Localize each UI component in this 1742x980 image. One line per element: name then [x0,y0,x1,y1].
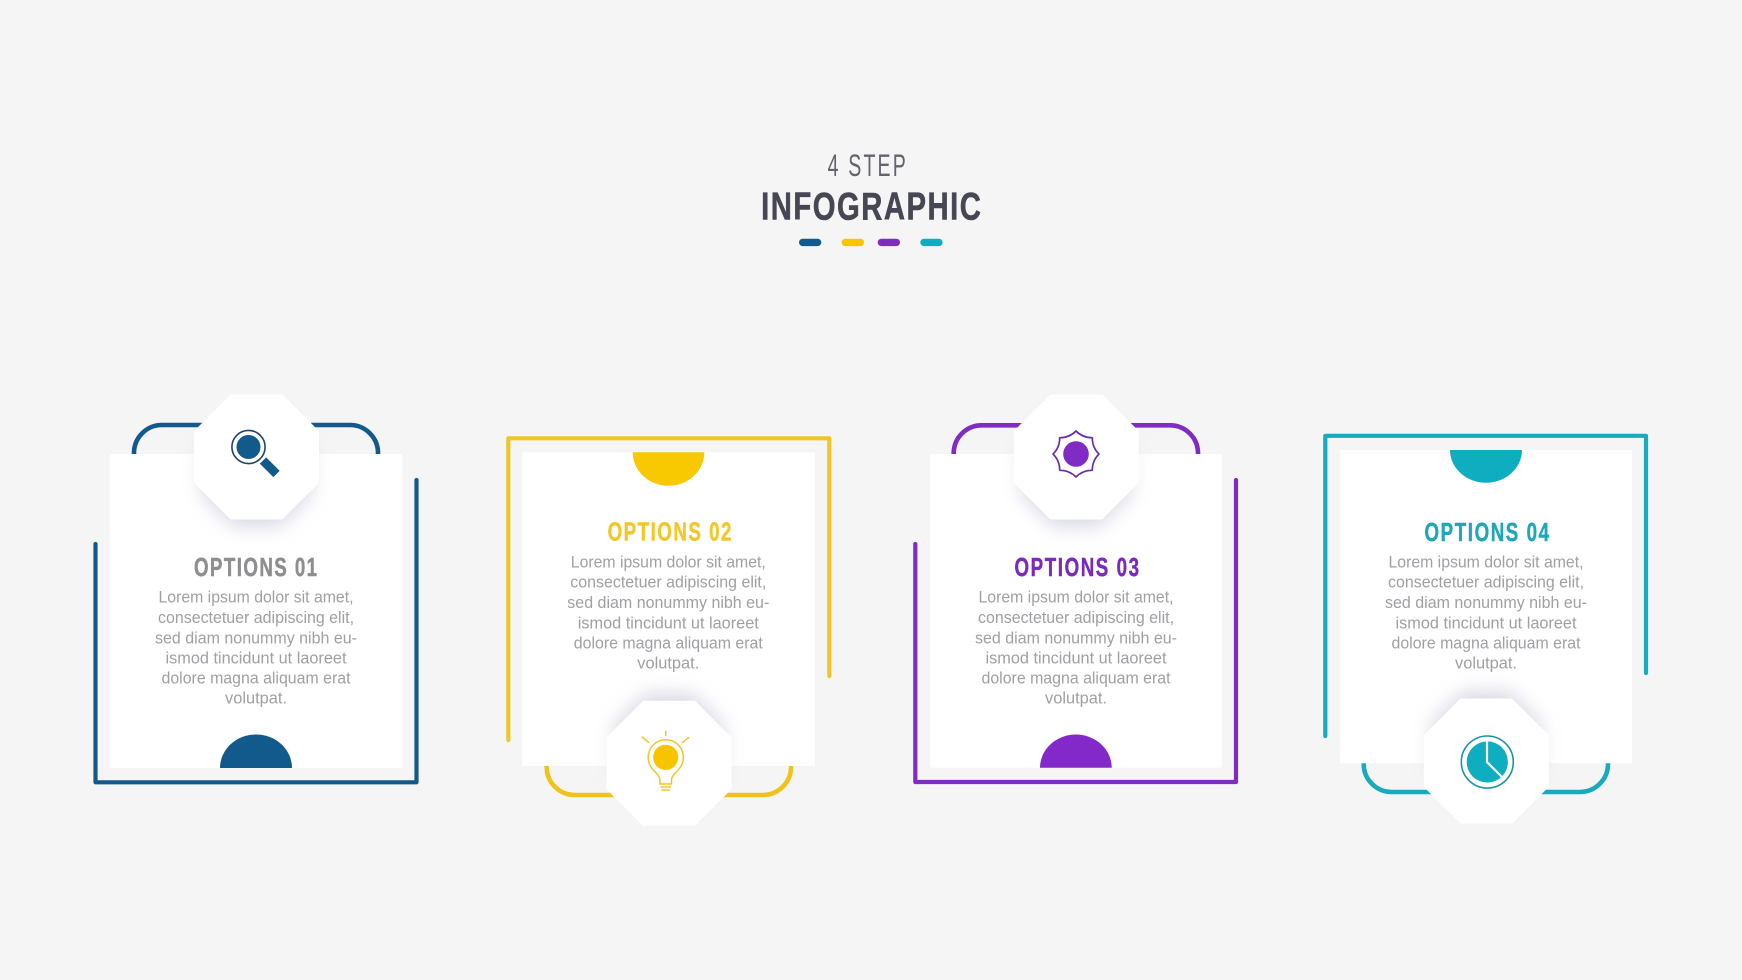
body text: options 03: ismod tincidunt ut laoreet [986,649,1167,667]
colour key dashes [799,239,943,246]
body text: options 03: volutpat. [1045,690,1107,708]
octagon badge: options 03 [1017,398,1136,527]
panel: options 01 [96,398,416,782]
heading: options 02: OPTIONS 02 [608,517,731,546]
card: options 01 [110,454,402,768]
panel: options 03 [915,398,1236,782]
heading: options 03: OPTIONS 03 [1015,552,1139,582]
octagon badge: options 02 [610,693,728,823]
panel: options 04 [1325,436,1646,820]
half circle: options 04 [1450,450,1522,483]
body text: options 01: ismod tincidunt ut laoreet [166,649,347,667]
body text: options 02: Lorem ipsum dolor sit amet, [571,553,766,571]
body text: options 01: dolore magna aliquam erat [162,670,351,688]
heading: options 04: OPTIONS 04 [1425,517,1549,547]
card: options 02 [522,452,815,766]
frame: options 03 [915,425,1236,782]
body text: options 03: consectetuer adipiscing elit, [978,609,1174,627]
body text: options 04: dolore magna aliquam erat [1392,635,1581,653]
frame: options 01 [96,425,416,782]
body text: options 04: ismod tincidunt ut laoreet [1396,614,1577,632]
panel: options 02 [508,438,829,823]
octagon badge: options 01 [197,398,316,527]
body text: options 04: volutpat. [1455,655,1517,673]
body text: options 02: ismod tincidunt ut laoreet [578,614,759,632]
icon: magnifying glass [232,430,276,474]
icon: light bulb [642,731,689,790]
icon: pie clock [1461,736,1513,788]
body text: options 02: dolore magna aliquam erat [574,635,763,653]
half circle: options 03 [1040,735,1112,768]
body text: options 04: consectetuer adipiscing elit, [1388,574,1584,592]
octagon badge: options 04 [1427,691,1546,820]
body text: options 01: consectetuer adipiscing elit, [158,609,354,627]
icon: gear badge [1053,431,1099,477]
heading: options 01: OPTIONS 01 [194,552,317,582]
frame: options 02 [508,438,829,795]
frame: options 04 [1325,436,1646,792]
body text: options 04 [1385,553,1587,673]
body text: options 03: dolore magna aliquam erat [982,670,1171,688]
card: options 04 [1340,450,1632,763]
half circle: options 01 [220,734,292,768]
body text: options 03: sed diam nonummy nibh eu- [975,629,1177,647]
body text: options 04: sed diam nonummy nibh eu- [1385,594,1587,612]
body text: options 01: Lorem ipsum dolor sit amet, [158,589,354,607]
half circle: options 02 [633,452,704,486]
body text: options 02 [567,553,769,673]
body text: options 02: consectetuer adipiscing elit, [570,574,766,592]
body text: options 01: sed diam nonummy nibh eu- [155,629,357,647]
body text: options 03 [975,589,1177,708]
body text: options 04: Lorem ipsum dolor sit amet, [1388,553,1584,571]
body text: options 03: Lorem ipsum dolor sit amet, [978,589,1174,607]
body text: options 01 [155,589,357,708]
body text: options 02: sed diam nonummy nibh eu- [567,594,769,612]
title block [761,147,981,246]
body text: options 01: volutpat. [225,690,287,708]
body text: options 02: volutpat. [637,655,699,673]
title: 4 step: 4 STEP [828,147,906,183]
title: infographic: INFOGRAPHIC [761,185,981,228]
card: options 03 [930,454,1222,768]
